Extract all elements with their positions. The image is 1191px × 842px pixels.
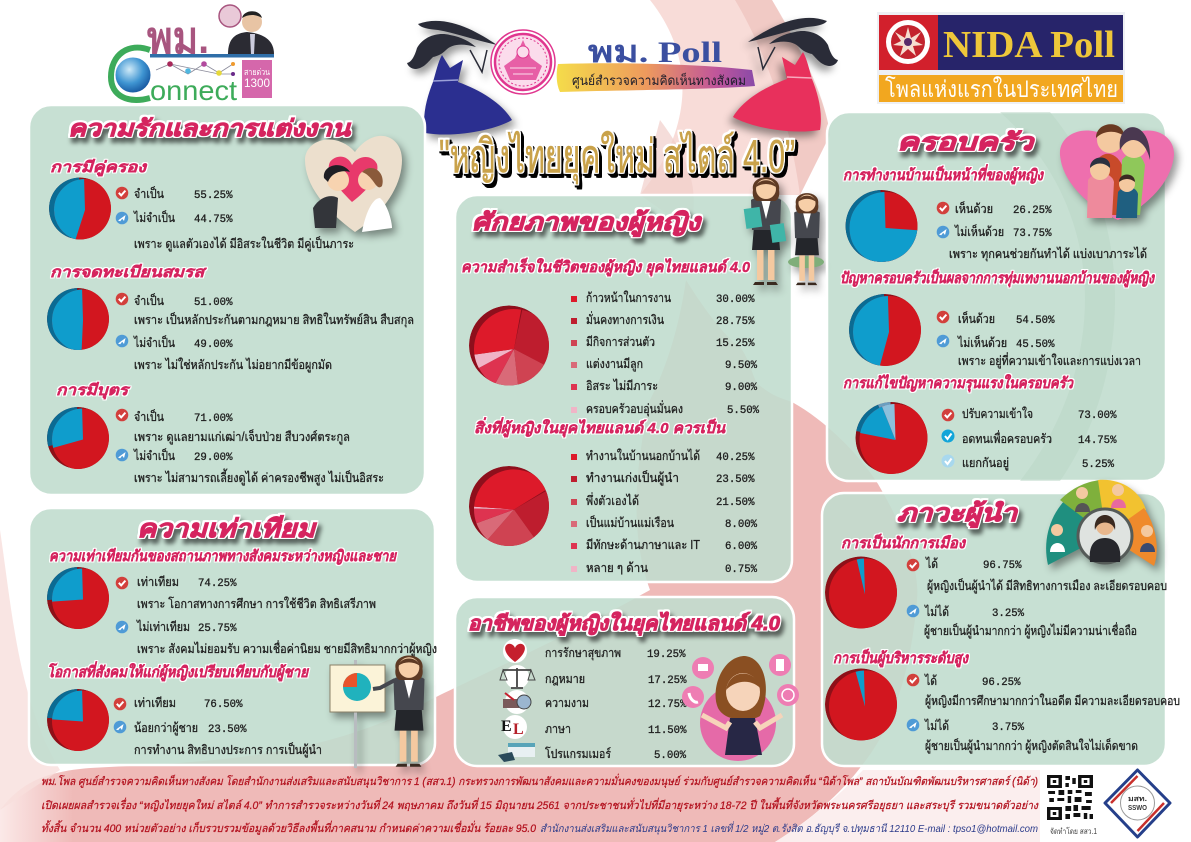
legend: having children: เพราะ ไม่สามารถเลี้ยงดูได้ ค่าครองชีพสูง ไม่เป็นอิสระ: [134, 468, 384, 486]
icon: EL (language): [501, 715, 527, 739]
legend: what women should be: พึ่งตัวเองได้: [586, 492, 639, 508]
pie chart: social status equality: [47, 567, 114, 630]
legend: violence solutions: 73.00%: [1078, 410, 1117, 422]
legend: family problems: 54.50%: [1016, 315, 1055, 327]
legend: what women should be: 23.50%: [716, 474, 755, 486]
pie chart: what women should be: [469, 466, 549, 546]
heading: ภาวะผู้นำ: [897, 500, 1019, 528]
legend: housework: เห็นด้วย: [955, 201, 993, 216]
legend: marriage registration: ไม่จำเป็น: [133, 335, 175, 350]
legend: life success: 9.00%: [725, 382, 758, 394]
illustration: kissing couple in heart: [305, 136, 402, 232]
legend: social status equality: เท่าเทียม: [137, 575, 179, 589]
legend: violence solutions: ปรับความเข้าใจ: [962, 407, 1033, 421]
legend: life success: ครอบครัวอบอุ่นมั่นคง: [586, 400, 683, 417]
legend: family problems: เห็นด้วย: [958, 311, 995, 326]
legend: having children: ไม่จำเป็น: [133, 448, 175, 463]
legend: politician: 3.25%: [992, 608, 1025, 620]
logo text: พม. Poll: ศูนย์สำรวจความคิดเห็นทางสังคม: [572, 71, 746, 89]
legend: family problems: ไม่เห็นด้วย: [957, 335, 1007, 350]
seal small: [219, 5, 241, 27]
QR code: [1047, 775, 1093, 820]
list: careers: 12.75%: [648, 699, 687, 711]
pie chart: housework: [846, 190, 922, 264]
illustration: woman with communication icons: [682, 654, 799, 761]
pie chart: having children: [47, 407, 114, 470]
pie chart: life success: [469, 306, 549, 386]
legend: marriage registration: [116, 293, 414, 373]
legend: what women should be: 8.00%: [725, 519, 758, 531]
subheading: partner: การมีคู่ครอง: [50, 159, 148, 177]
legend: having children: 71.00%: [194, 413, 233, 425]
legend: housework: ไม่เห็นด้วย: [954, 224, 1004, 239]
logo: Connect: onnect: [150, 75, 237, 106]
legend: family problems: [937, 311, 1141, 369]
legend: partner: 55.25%: [194, 190, 233, 202]
legend: life success: 15.25%: [716, 338, 755, 350]
legend: senior executive: ไม่ได้: [924, 719, 949, 733]
heading: อาชีพของผู้หญิงในยุคไทยแลนด์ 4.0: [468, 611, 780, 636]
legend: life success: อิสระ ไม่มีภาระ: [586, 379, 658, 393]
legend: senior executive: ได้: [924, 674, 937, 688]
icon: pink dress with hat: [733, 18, 838, 132]
legend: social status equality: [116, 575, 437, 657]
legend: opportunity: 76.50%: [204, 699, 243, 711]
legend: politician: ไม่ได้: [924, 605, 949, 619]
legend: life success: 9.50%: [725, 360, 758, 372]
illustration: woman presenting chart: [330, 655, 424, 768]
icon: computer (programmer): [498, 743, 535, 762]
legend: opportunity: เท่าเทียม: [134, 696, 176, 710]
legend: social status equality: 74.25%: [198, 578, 237, 590]
icon: EL (language): L: [513, 721, 524, 738]
list: careers: ความงาม: [545, 696, 589, 710]
list: careers: การรักษาสุขภาพ: [545, 646, 621, 661]
pie chart: senior executive: [825, 668, 901, 742]
footer text: พม.โพล ศูนย์สำรวจความคิดเห็นทางสังคม โดยสำนักงานส่งเสริมและสนับสนุนวิชาการ 1 (สสว.1) กระทรวงการพัฒนาสังคมและความมั่นคงของมนุษย์ ร่วมกับศูนย์สำรวจความคิดเห็น “นิด้าโพล” สถาบันบัณฑิตพัฒนบริหารศาสตร์ (นิด้า): [41, 773, 1038, 788]
subheading: politician: การเป็นนักการเมือง: [841, 533, 967, 552]
pie chart: opportunity: [47, 689, 114, 752]
logo: NIDA Poll: NIDA Poll: [943, 24, 1115, 66]
legend: marriage registration: เพราะ เป็นหลักประกันตามกฎหมาย สิทธิในทรัพย์สิน สืบสกุล: [134, 312, 414, 328]
list: careers: 11.50%: [648, 725, 687, 737]
legend: politician: ได้: [925, 557, 938, 571]
legend: what women should be: เป็นแม่บ้านแม่เรือน: [586, 515, 674, 530]
footer text: เปิดเผยผลสำรวจเรื่อง “หญิงไทยยุคใหม่ สไตล์ 4.0” ทำการสำรวจระหว่างวันที่ 24 พฤษภาคม ถึงวันที่ 15 มิถุนายน 2561 จากประชาชนทั่วไปที่มีอายุระหว่าง 18-72 ปี ในพื้นที่จังหวัดพระนครศรีอยุธยา และสระบุรี รวมขนาดตัวอย่าง: [41, 797, 1040, 812]
legend: housework: 73.75%: [1013, 228, 1052, 240]
subheading: violence solutions: การแก้ไขปัญหาความรุนแรงในครอบครัว: [843, 374, 1074, 393]
legend: violence solutions: 5.25%: [1082, 459, 1115, 471]
panel: equality: [29, 508, 437, 768]
icon: cosmetics (beauty): [503, 690, 531, 714]
panel: family: [827, 112, 1174, 481]
legend: opportunity: น้อยกว่าผู้ชาย: [134, 721, 198, 736]
footer text: ทั้งสิ้น จำนวน 400 หน่วยตัวอย่าง เก็บรวบรวมข้อมูลด้วยวิธีลงพื้นที่ภาคสนาม กำหนดค่าความเชื่อมั่น ร้อยละ 95.0: [41, 820, 537, 835]
logo: Connect: [111, 5, 274, 106]
legend: having children: จำเป็น: [134, 409, 164, 424]
heading: ความรักและการแต่งงาน: [68, 115, 351, 141]
heading: ศักยภาพของผู้หญิง: [472, 209, 703, 237]
legend: having children: เพราะ ดูแลยามแก่เฒ่า/เจ็บป่วย สืบวงศ์ตระกูล: [134, 429, 350, 445]
legend: what women should be: 40.25%: [716, 452, 755, 464]
panel: love and marriage: [29, 105, 425, 495]
legend: marriage registration: จำเป็น: [134, 293, 164, 308]
legend: opportunity: [114, 696, 322, 758]
list: careers: กฎหมาย: [545, 672, 585, 686]
logo: Connect: 1300: [244, 76, 270, 90]
footer text: สำนักงานส่งเสริมและสนับสนุนวิชาการ 1 เลขที่ 1/2 หมู่2 ต.รังสิต อ.ธัญบุรี จ.ปทุมธานี 12110 E-mail : tpso1@hotmail.com: [540, 821, 1038, 835]
list: careers: 17.25%: [648, 675, 687, 687]
legend: senior executive: 3.75%: [992, 722, 1025, 734]
pie chart: family problems: [849, 294, 925, 368]
legend: having children: [116, 409, 384, 486]
legend: life success: แต่งงานมีลูก: [586, 357, 643, 372]
globe: [115, 57, 151, 93]
legend: what women should be: 6.00%: [725, 541, 758, 553]
logo: NIDA Poll: [877, 12, 1125, 104]
legend: politician: ผู้ชายเป็นผู้นำมากกว่า ผู้หญิงไม่มีความน่าเชื่อถือ: [924, 622, 1137, 639]
panel: leadership: [822, 480, 1180, 766]
legend: partner: 44.75%: [194, 214, 233, 226]
subheading: marriage registration: การจดทะเบียนสมรส: [50, 264, 207, 281]
list: careers: [545, 646, 687, 762]
legend: what women should be: ทำงานเก่งเป็นผู้นำ: [586, 470, 679, 486]
logo text: พม. Poll: [557, 36, 755, 92]
heading: ความเท่าเทียม: [137, 515, 318, 543]
legend: politician: 96.75%: [983, 560, 1022, 572]
legend: senior executive: [907, 674, 1180, 754]
pie chart: marriage registration: [47, 288, 114, 352]
icon: ministry seal: [491, 30, 555, 94]
illustration: family in a heart: [1060, 124, 1174, 220]
legend: life success: 28.75%: [716, 316, 755, 328]
legend: politician: [907, 557, 1167, 639]
heading: ครอบครัว: [897, 129, 1035, 156]
legend: family problems: 45.50%: [1016, 339, 1055, 351]
legend: housework: เพราะ ทุกคนช่วยกันทำได้ แบ่งเบาภาระได้: [949, 247, 1147, 262]
legend: violence solutions: อดทนเพื่อครอบครัว: [962, 430, 1052, 446]
logo: Connect: สายด่วน: [244, 67, 270, 77]
legend: life success: 30.00%: [716, 294, 755, 306]
legend: what women should be: 0.75%: [725, 564, 758, 576]
legend: partner: เพราะ ดูแลตัวเองได้ มีอิสระในชีวิต มีคู่เป็นภาระ: [134, 236, 354, 252]
subheading: housework: การทำงานบ้านเป็นหน้าที่ของผู้หญิง: [843, 164, 1044, 185]
subheading: life success: ความสำเร็จในชีวิตของผู้หญิง ยุคไทยแลนด์ 4.0: [461, 257, 751, 277]
credit: จัดทำโดย สสว.1: [1050, 826, 1097, 836]
pie chart: politician: [825, 556, 901, 630]
illustration: leader with colour wheel: [1046, 480, 1157, 566]
legend: housework: 26.25%: [1013, 205, 1052, 217]
icon: heart (health care): [503, 639, 527, 663]
icon: blue dress with hat: [407, 21, 512, 135]
legend: what women should be: 21.50%: [716, 497, 755, 509]
subheading: having children: การมีบุตร: [56, 382, 131, 400]
legend: violence solutions: 14.75%: [1078, 435, 1117, 447]
legend: violence solutions: [942, 407, 1117, 471]
subheading: opportunity: โอกาสที่สังคมให้แก่ผู้หญิงเปรียบเทียบกับผู้ชาย: [47, 661, 309, 682]
subheading: social status equality: ความเท่าเทียมกันของสถานภาพทางสังคมระหว่างหญิงและชาย: [49, 548, 397, 565]
legend: what women should be: มีทักษะด้านภาษาและ IT: [586, 538, 700, 552]
legend: social status equality: 25.75%: [198, 623, 237, 635]
legend: life success: ก้าวหน้าในการงาน: [586, 291, 671, 305]
legend: life success: [571, 291, 760, 417]
pie chart: violence solutions: [856, 402, 932, 476]
list: careers: 19.25%: [647, 649, 686, 661]
legend: violence solutions: แยกกันอยู่: [962, 456, 1009, 471]
footer text: [41, 773, 1040, 835]
legend: family problems: เพราะ อยู่ที่ความเข้าใจและการแบ่งเวลา: [958, 352, 1141, 369]
logo: Connect: พม.: [147, 14, 209, 63]
logo: NIDA Poll: โพลแห่งแรกในประเทศไทย: [885, 76, 1118, 102]
illustration: two businesswomen: [744, 177, 824, 285]
logo text: พม. Poll: พม. Poll: [588, 36, 722, 69]
icon: EL (language): E: [501, 718, 512, 735]
legend: life success: มีกิจการส่วนตัว: [586, 335, 655, 349]
legend: partner: [116, 186, 354, 252]
legend: what women should be: ทำงานในบ้านนอกบ้านได้: [586, 449, 700, 463]
legend: partner: ไม่จำเป็น: [133, 210, 175, 225]
legend: senior executive: 96.25%: [982, 677, 1021, 689]
list: careers: 5.00%: [654, 750, 687, 762]
legend: opportunity: การทำงาน สิทธิบางประการ การเป็นผู้นำ: [134, 742, 322, 758]
logo: ministry diamond: SSWO: [1128, 805, 1147, 812]
legend: social status equality: เพราะ โอกาสทางการศึกษา การใช้ชีวิต สิทธิเสรีภาพ: [137, 596, 376, 611]
pie chart: partner: [49, 178, 116, 241]
legend: partner: จำเป็น: [134, 186, 164, 201]
list: careers: ภาษา: [545, 722, 571, 736]
subheading: what women should be: สิ่งที่ผู้หญิงในยุคไทยแลนด์ 4.0 ควรเป็น: [474, 417, 726, 438]
panel: women's potential: [455, 177, 824, 582]
legend: social status equality: เพราะ สังคมไม่ยอมรับ ความเชื่อค่านิยม ชายมีสิทธิมากกว่าผู้หญิง: [137, 640, 437, 657]
icon: scales (law): [500, 665, 535, 689]
logo: ministry diamond: มสท.: [1128, 796, 1147, 803]
legend: marriage registration: 51.00%: [194, 297, 233, 309]
legend: life success: มั่นคงทางการเงิน: [586, 311, 664, 327]
legend: life success: 5.50%: [727, 405, 760, 417]
portrait of the minister: [228, 11, 274, 54]
legend: marriage registration: เพราะ ไม่ใช่หลักประกัน ไม่อยากมีข้อผูกมัด: [134, 358, 332, 373]
legend: having children: 29.00%: [194, 452, 233, 464]
legend: what women should be: [571, 449, 758, 576]
legend: housework: [937, 201, 1147, 262]
list: careers: โปรแกรมเมอร์: [545, 746, 611, 761]
subheading: senior executive: การเป็นผู้บริหารระดับสูง: [833, 648, 969, 668]
legend: social status equality: ไม่เท่าเทียม: [136, 620, 190, 634]
title: "หญิงไทยยุคใหม่ สไตล์ 4.0”: [439, 130, 795, 185]
legend: marriage registration: 49.00%: [194, 339, 233, 351]
panel: careers: [455, 597, 799, 766]
logo: ministry diamond: [1105, 770, 1170, 837]
legend: what women should be: หลาย ๆ ด้าน: [586, 561, 648, 575]
legend: senior executive: ผู้ชายเป็นผู้นำมากกว่า ผู้หญิงตัดสินใจไม่เด็ดขาด: [925, 738, 1138, 754]
legend: opportunity: 23.50%: [208, 724, 247, 736]
